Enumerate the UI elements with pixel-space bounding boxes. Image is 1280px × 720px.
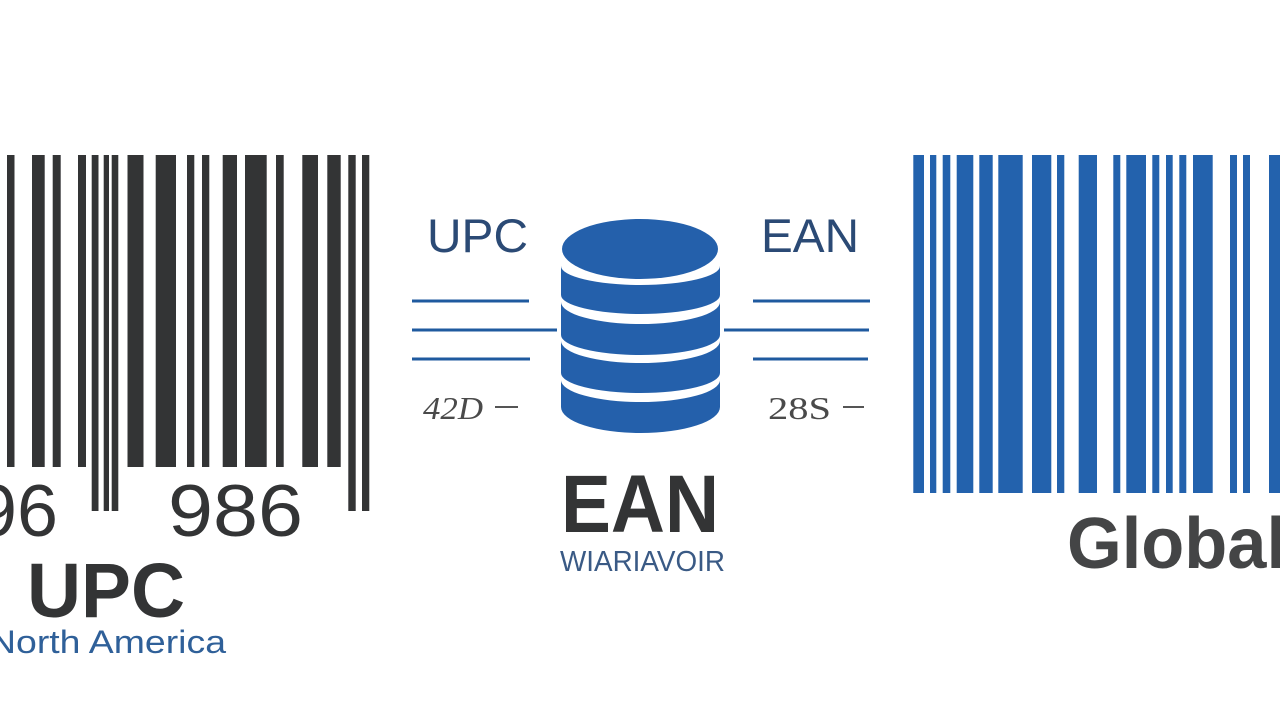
left connector lines	[412, 301, 557, 359]
barcode digits right: 986	[168, 471, 303, 552]
right small code: 28S	[768, 390, 831, 426]
left small code: 42D	[423, 390, 483, 426]
heading: EAN: EAN	[561, 459, 719, 550]
panel: central database comparison	[412, 209, 870, 578]
heading: UPC: UPC	[27, 548, 185, 634]
label: UPC: UPC	[427, 209, 528, 262]
icon: database cylinder	[561, 219, 720, 433]
right small code	[768, 390, 864, 426]
black barcode bars	[7, 155, 369, 511]
right connector lines	[724, 301, 870, 359]
blue barcode bars	[913, 155, 1280, 493]
panel: global barcode	[913, 155, 1280, 584]
label: EAN: EAN	[761, 209, 859, 262]
panel: UPC barcode, North America	[0, 155, 369, 660]
left small code	[423, 390, 518, 426]
label: distorted EAN subtitle: WIARIAVOIR	[560, 546, 725, 578]
